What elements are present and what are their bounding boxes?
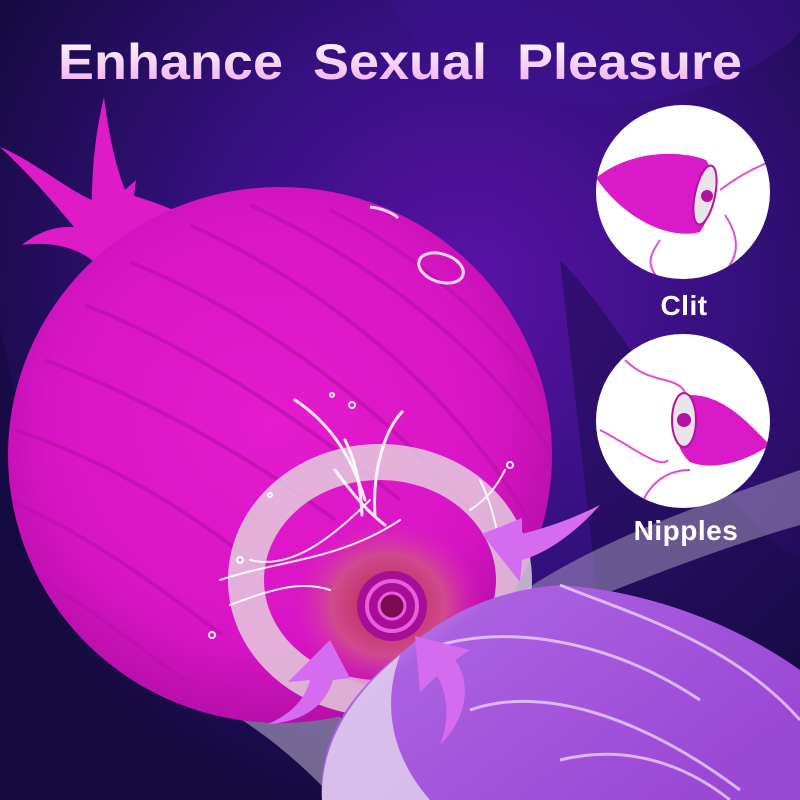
product ribs: [8, 205, 552, 685]
product button: [415, 248, 467, 288]
panel: nipples usage: [596, 334, 770, 508]
product: ribbed pink bulb: [0, 97, 552, 723]
title: Enhance Sexual Pleasure: [58, 34, 742, 90]
light beams: [190, 470, 800, 800]
arrow: lower right: [415, 636, 470, 745]
icon: device in circle: [596, 154, 721, 234]
product stem and leaves: [0, 97, 178, 268]
suction head: [357, 571, 427, 641]
fabric folds: [322, 585, 800, 800]
label: Clit: Clit: [660, 290, 708, 321]
arrow: upper right: [482, 505, 600, 582]
product body: [8, 187, 552, 723]
panel: clit usage: [596, 105, 775, 280]
label: Nipples: Nipples: [634, 515, 738, 546]
arrow: lower left: [268, 640, 350, 724]
translucent suction ring: [246, 462, 514, 698]
water splash: [209, 393, 513, 638]
icon: device in circle: [672, 393, 770, 466]
